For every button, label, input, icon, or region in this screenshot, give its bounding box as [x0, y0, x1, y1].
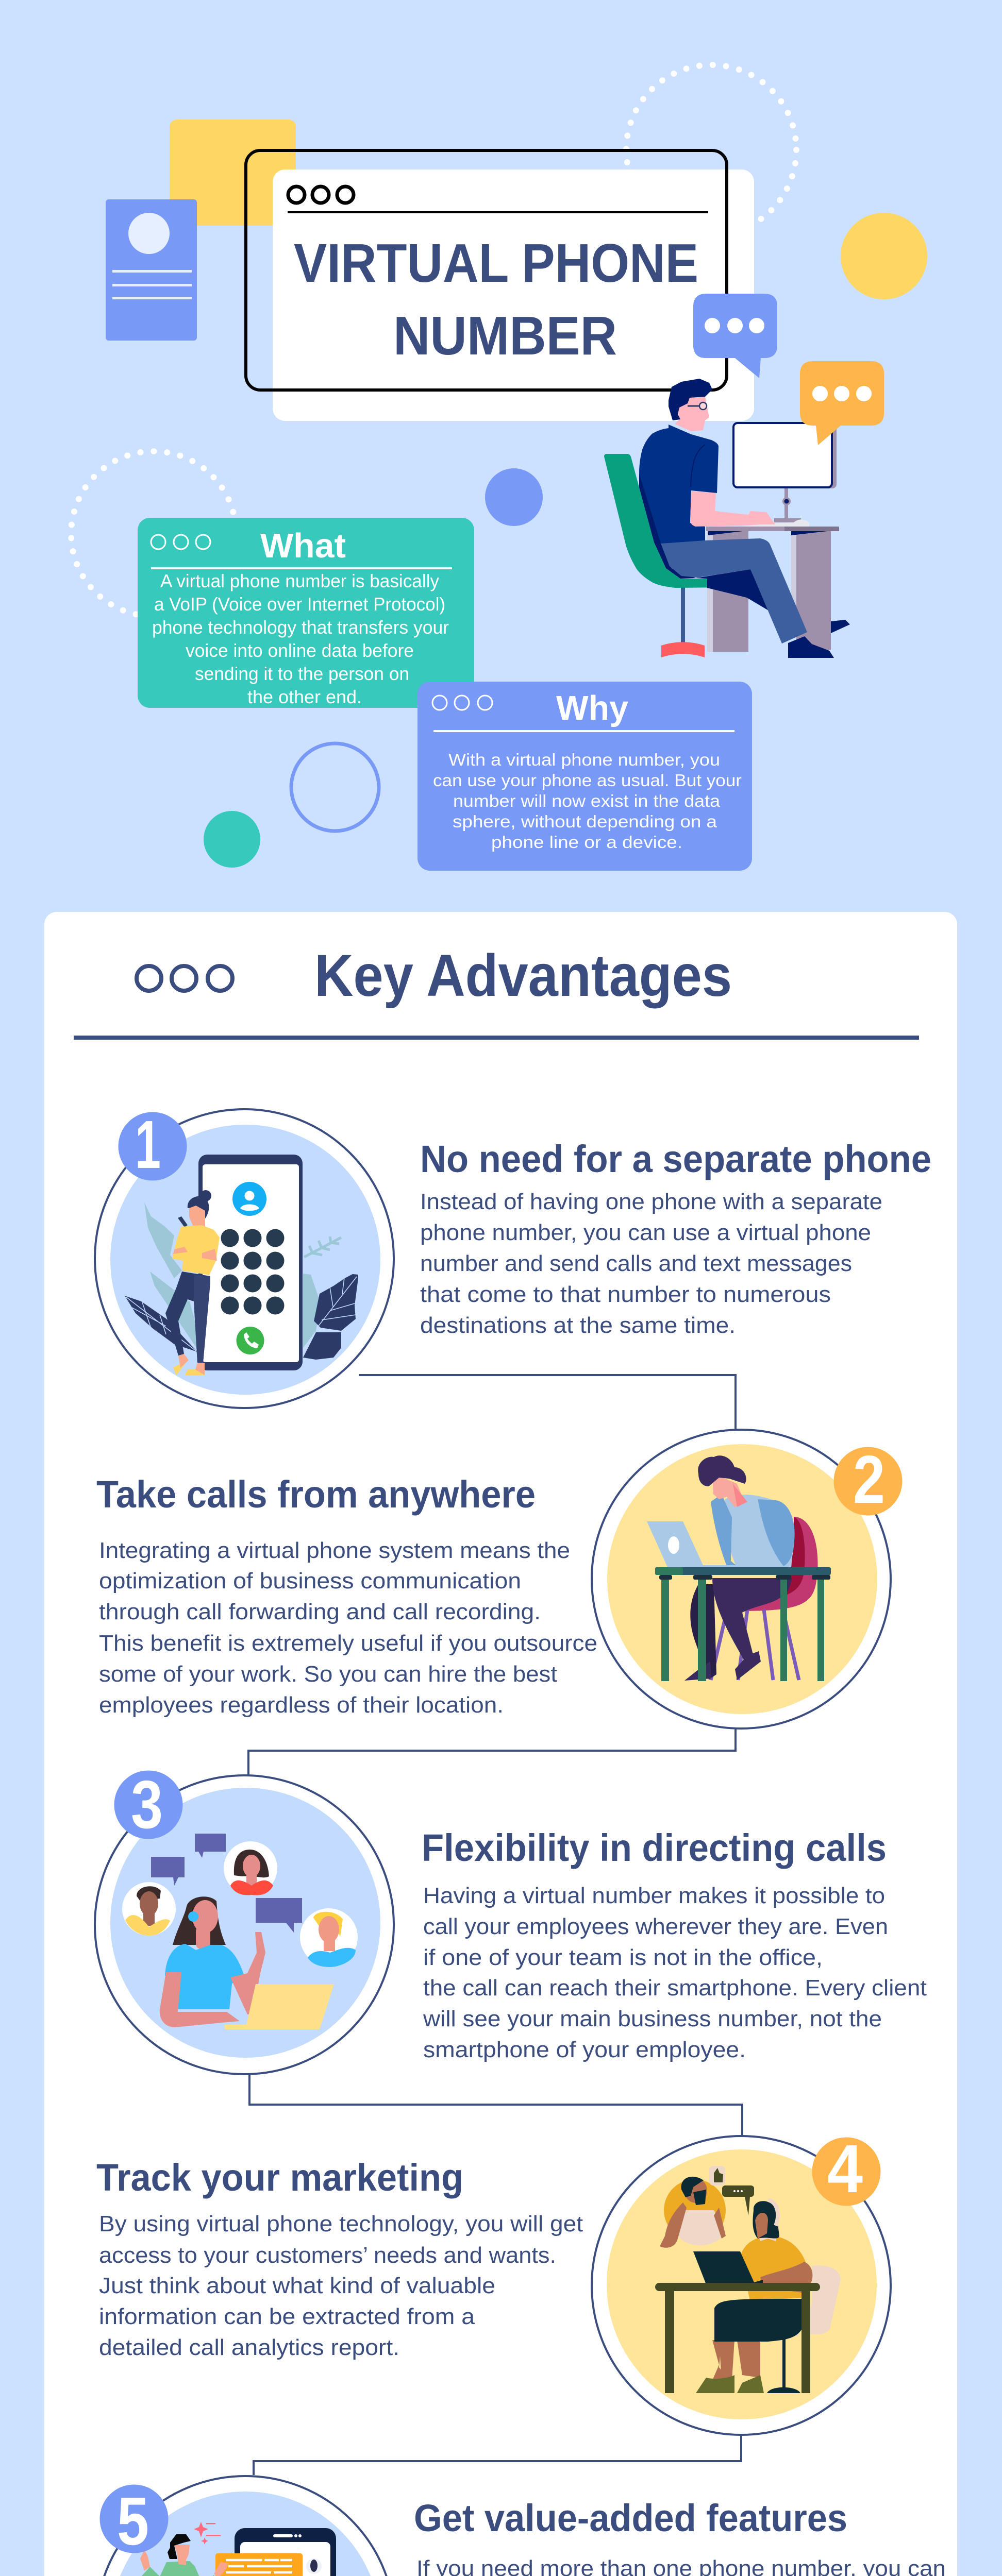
- text 4: Just think about what kind of valuable: [99, 2273, 495, 2298]
- badge 3: 3: [131, 1767, 163, 1842]
- text 3: the call can reach their smartphone. Every client: [423, 1975, 927, 2001]
- text 2: employees regardless of their location.: [99, 1692, 504, 1718]
- laptop: [225, 1984, 334, 2029]
- desk: [706, 527, 839, 652]
- text: why: With a virtual phone number, you: [448, 750, 720, 769]
- text 2: This benefit is extremely useful if you outsource: [99, 1631, 597, 1656]
- trousers: [661, 538, 807, 643]
- blue speech bubble: [693, 294, 777, 378]
- illustration: chat on smartphone: [96, 2476, 395, 2576]
- title: VIRTUAL PHONE: [294, 233, 698, 294]
- title window: [246, 150, 754, 421]
- text: what: a VoIP (Voice over Internet Protocol): [154, 594, 445, 615]
- panel: what: [138, 518, 474, 708]
- monitor: [733, 423, 837, 527]
- text 1: Instead of having one phone with a separate: [420, 1189, 882, 1214]
- text 2: some of your work. So you can hire the best: [99, 1662, 557, 1687]
- text 1: [420, 1189, 882, 1338]
- illustration: customer service at table: [592, 2136, 891, 2435]
- section 4: [96, 2131, 891, 2435]
- heading: what: What: [260, 527, 346, 565]
- panel: key advantages: [44, 912, 957, 2576]
- badge 4: 4: [827, 2131, 863, 2207]
- blue circle: [485, 468, 543, 526]
- text 1: phone number, you can use a virtual phone: [420, 1220, 871, 1245]
- text 3: call your employees wherever they are. Even: [423, 1914, 888, 1939]
- text: why: number will now exist in the data: [453, 791, 721, 810]
- back leg: [696, 569, 769, 611]
- text 4: access to your customers’ needs and wants.: [99, 2243, 556, 2268]
- illustration: phone keypad: [95, 1109, 394, 1408]
- title: NUMBER: [393, 306, 617, 366]
- section 2: [96, 1430, 902, 1728]
- text 4: [99, 2211, 583, 2360]
- heading 4: Track your marketing: [96, 2156, 463, 2199]
- text: what: phone technology that transfers your: [152, 617, 449, 638]
- man at desk: [604, 379, 850, 658]
- text: what: sending it to the person on: [195, 663, 409, 684]
- badge 1: 1: [135, 1107, 161, 1182]
- title: [294, 233, 698, 366]
- text: why: [433, 750, 742, 852]
- sparkles: [194, 2522, 366, 2576]
- section 1: [95, 1107, 931, 1408]
- text 2: optimization of business communication: [99, 1568, 521, 1594]
- leaves: [125, 1202, 358, 1360]
- section 3: [95, 1767, 927, 2074]
- heading: key advantages: Key Advantages: [314, 943, 732, 1009]
- badge 5: 5: [117, 2483, 149, 2559]
- head: [669, 379, 712, 431]
- badge 5: [100, 2483, 168, 2559]
- text 3: smartphone of your employee.: [423, 2037, 746, 2062]
- teal circle: [204, 811, 260, 868]
- chair: [604, 454, 733, 657]
- heading 2: Take calls from anywhere: [96, 1473, 536, 1516]
- shoes: [788, 636, 834, 658]
- section 5: [96, 2476, 946, 2576]
- text 3: if one of your team is not in the office,: [423, 1945, 823, 1970]
- badge 1: [119, 1107, 187, 1182]
- text 1: that come to that number to numerous: [420, 1282, 831, 1307]
- arm: [690, 491, 775, 527]
- text: why: sphere, without depending on a: [453, 812, 717, 831]
- text: what: voice into online data before: [186, 640, 414, 661]
- badge 4: [812, 2131, 880, 2207]
- text: what: A virtual phone number is basically: [160, 570, 439, 591]
- torso: [639, 425, 719, 579]
- text 1: number and send calls and text messages: [420, 1251, 852, 1276]
- yellow square: [170, 120, 296, 226]
- panel: why: [417, 682, 752, 871]
- illustration: call centre team: [95, 1775, 394, 2074]
- dotted circle top right: [626, 65, 796, 235]
- text: why: can use your phone as usual. But your: [433, 771, 742, 790]
- badge 2: [834, 1442, 902, 1517]
- chat bubble orange: [215, 2553, 303, 2576]
- avatars: [122, 1841, 358, 1967]
- man on phone: [660, 2166, 754, 2248]
- badge 2: 2: [853, 1442, 885, 1517]
- text 3: Having a virtual number makes it possible to: [423, 1883, 885, 1908]
- orange speech bubble: [800, 361, 884, 445]
- window dots: [137, 966, 232, 991]
- text 4: By using virtual phone technology, you will get: [99, 2211, 583, 2236]
- headset woman: [160, 1896, 265, 2027]
- profile card icon: [106, 199, 197, 341]
- text 2: Integrating a virtual phone system means the: [99, 1538, 570, 1563]
- text: why: phone line or a device.: [491, 833, 682, 852]
- header illustration: [71, 65, 927, 658]
- outline circle: [291, 743, 379, 831]
- text 4: information can be extracted from a: [99, 2304, 475, 2329]
- woman with headset: [696, 2200, 812, 2393]
- connectors: [248, 1375, 742, 2475]
- text: what: the other end.: [247, 686, 362, 707]
- text 2: [99, 1538, 597, 1718]
- illustration: stressed worker at desk: [592, 1430, 891, 1728]
- text 1: destinations at the same time.: [420, 1313, 736, 1338]
- yellow circle: [841, 213, 927, 299]
- text 2: through call forwarding and call recording.: [99, 1599, 541, 1624]
- heading: why: Why: [556, 689, 628, 727]
- badge 3: [114, 1767, 182, 1842]
- text 3: [423, 1883, 927, 2062]
- phone: [235, 2528, 336, 2576]
- heading 5: Get value-added features: [414, 2497, 847, 2539]
- heading 3: Flexibility in directing calls: [422, 1826, 887, 1869]
- text 4: detailed call analytics report.: [99, 2335, 399, 2360]
- dotted circle left: [71, 451, 236, 616]
- heading 1: No need for a separate phone: [420, 1138, 931, 1180]
- text: what: [152, 570, 449, 707]
- phone: [198, 1155, 303, 1370]
- text 3: will see your main business number, not the: [423, 2006, 882, 2031]
- woman pointing: [135, 2534, 228, 2576]
- woman: [165, 1190, 220, 1375]
